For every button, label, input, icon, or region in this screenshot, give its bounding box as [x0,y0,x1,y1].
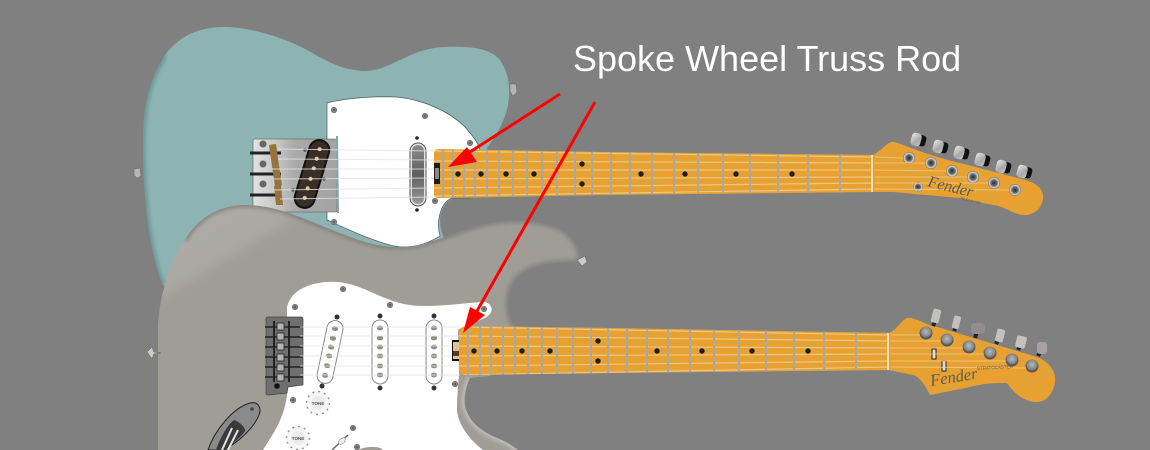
stratocaster neck pickup [320,314,442,390]
telecaster fret dots [455,161,795,187]
telecaster strap button top [510,84,517,96]
stratocaster string trees [932,349,946,371]
telecaster pickguard screws [331,107,473,225]
telecaster bridge pickup [292,138,332,210]
telecaster bridge plate [250,136,338,213]
stratocaster tuners [920,308,1047,372]
telecaster tuners [903,132,1033,196]
stratocaster jack plate [208,403,260,450]
telecaster headstock logo: Fender [925,173,976,201]
arrow: to stratocaster truss rod [463,102,595,333]
telecaster truss rod wheel [434,163,440,184]
telecaster headstock [870,132,1048,220]
stratocaster headstock model: STRATOCASTER [977,364,1014,371]
telecaster headstock model: TELECASTER [960,196,982,205]
telecaster strings [272,149,434,199]
stratocaster strap button horn [577,256,587,266]
stratocaster tone knob 1: TONE [312,401,324,406]
stratocaster bridge pickup [316,319,344,385]
telecaster headstock strings [875,157,1009,190]
stratocaster strings [300,327,460,375]
guitar: telecaster [134,27,1048,290]
stratocaster tremolo bridge [265,317,303,395]
stratocaster tone knob 2 [286,426,310,450]
stratocaster headstock logo: Fender [928,364,979,390]
telecaster neck [434,149,874,198]
stratocaster headstock strings [891,335,1026,368]
stratocaster fret dots [471,338,811,364]
telecaster pickguard [327,97,480,247]
telecaster strap button side [134,168,141,178]
telecaster neck pickup [410,136,426,212]
telecaster body [143,27,509,290]
stratocaster strap button side [147,347,161,359]
stratocaster truss rod wheel [452,340,460,361]
stratocaster pickguard [263,282,492,450]
stratocaster pickup switch [332,435,348,450]
stratocaster tone knob 1 [306,392,330,414]
stratocaster neck [452,326,889,375]
title: spoke wheel truss rod: Spoke Wheel Truss Rod [573,38,961,79]
stratocaster pickguard screws [290,286,487,450]
stratocaster tone knob 2: TONE [292,436,304,441]
arrow: to telecaster truss rod [448,94,560,167]
guitar: stratocaster [147,205,1058,450]
stratocaster middle pickup [372,314,388,390]
stratocaster body [158,205,580,450]
stratocaster headstock [886,308,1058,406]
